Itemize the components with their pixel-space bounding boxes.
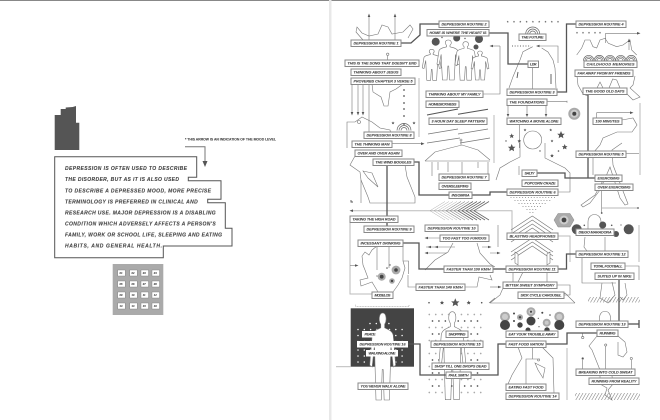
label: PEACE bbox=[364, 333, 376, 337]
label bbox=[576, 21, 626, 28]
routine index grid: 05 bbox=[120, 282, 123, 286]
family circles bbox=[432, 34, 483, 50]
label: HOME IS WHERE THE HEART IS bbox=[430, 31, 487, 35]
figure: diego maradona bbox=[582, 214, 639, 303]
arrow: torso bbox=[536, 45, 540, 47]
t-bar: routine 13 bbox=[638, 320, 640, 328]
label bbox=[576, 151, 626, 158]
label bbox=[429, 118, 487, 124]
label bbox=[595, 273, 634, 280]
label: PROVERBS CHAPTER 3 VERSE 5 bbox=[354, 80, 413, 84]
label: DEPRESSION ROUTINE 7 bbox=[442, 176, 487, 180]
figure: drinker bbox=[360, 246, 408, 292]
figure: peace walker bbox=[370, 313, 396, 400]
arrows: routine 1 up bbox=[368, 14, 396, 40]
label bbox=[425, 225, 478, 232]
routine index grid: 01 bbox=[120, 271, 123, 275]
label bbox=[595, 175, 622, 182]
label: HOMESICKNESS bbox=[428, 103, 457, 107]
description text: CONDITION WHICH ADVERSELY AFFECTS A PERSON'S bbox=[65, 221, 216, 227]
label bbox=[432, 363, 489, 370]
label bbox=[416, 284, 465, 290]
icon: mood level bar bbox=[55, 106, 79, 150]
label: DEPRESSION ROUTINE 4 bbox=[578, 23, 624, 27]
connectors: headphones bbox=[558, 236, 570, 262]
label: FAST FOOD NATION bbox=[508, 343, 544, 347]
label: OVERSLEEPING bbox=[442, 185, 469, 189]
label: RUNNING FROM REALITY bbox=[592, 380, 637, 384]
label: INSOMNIA bbox=[452, 194, 470, 198]
label bbox=[372, 292, 393, 298]
routine index grid: 13 bbox=[120, 304, 123, 308]
stars bbox=[391, 121, 416, 124]
label bbox=[439, 183, 471, 190]
label: DEPRESSION ROUTINE 16 bbox=[360, 343, 406, 347]
label bbox=[446, 331, 468, 338]
description text: TERMINOLOGY IS PREFERRED IN CLINICAL AND bbox=[65, 199, 198, 205]
label: INCESSANT DRINKING bbox=[360, 242, 401, 246]
label: DEPRESSION ROUTINE 11 bbox=[508, 268, 556, 272]
label: FASTER THAN 140 KM/H bbox=[418, 286, 463, 290]
description text: DEPRESSION IS OFTEN USED TO DESCRIBE bbox=[65, 166, 188, 172]
label: DEPRESSION ROUTINE 5 bbox=[578, 153, 624, 157]
figure: fast car hill bbox=[408, 225, 498, 287]
description box bbox=[55, 157, 232, 258]
routine index grid: 11 bbox=[143, 293, 146, 297]
rainbow bbox=[397, 124, 411, 130]
footnote: * THIS ARROW IS AN INDICATION OF THE MOOD LEVEL bbox=[185, 138, 276, 142]
label: THE FOUNDATIONS bbox=[510, 101, 545, 105]
label: FAR AWAY FROM MY FRIENDS bbox=[578, 72, 631, 76]
food circles bbox=[500, 307, 564, 333]
label bbox=[589, 378, 639, 384]
arrows: proverbs down bbox=[351, 84, 364, 116]
maradona circles bbox=[572, 222, 634, 237]
label: DEPRESSION ROUTINE 14 bbox=[508, 395, 556, 399]
figure: eater bbox=[508, 347, 554, 393]
label: RUNNING bbox=[600, 332, 616, 336]
label: DEPRESSION ROUTINE 6 bbox=[510, 191, 556, 195]
label: WATCHING A MOVIE ALONE bbox=[510, 120, 559, 124]
description text: HABITS, AND GENERAL HEALTH. bbox=[65, 244, 162, 250]
arrow: mood level bbox=[185, 147, 208, 167]
family figures bbox=[422, 40, 489, 80]
arrow: 100 minutes bbox=[597, 111, 634, 118]
figure: runner bbox=[582, 311, 632, 400]
label: THE FUTURE bbox=[522, 36, 544, 40]
routine index grid: 12 bbox=[154, 293, 157, 297]
figures and connector lines bbox=[347, 14, 640, 400]
label: EXERCISING bbox=[598, 177, 620, 181]
label bbox=[575, 70, 633, 76]
label: DEPRESSION ROUTINE 15 bbox=[434, 343, 481, 347]
label bbox=[522, 180, 558, 186]
routine index grid: 08 bbox=[154, 282, 157, 286]
label bbox=[576, 251, 628, 258]
label bbox=[522, 170, 537, 176]
label bbox=[431, 341, 483, 348]
label bbox=[358, 383, 408, 390]
label bbox=[528, 61, 538, 68]
drink circles bbox=[376, 264, 400, 284]
label: CHILDHOOD MEMORIES bbox=[586, 63, 635, 67]
rainbow: the future bbox=[526, 27, 540, 34]
label: DEPRESSION ROUTINE 2 bbox=[442, 23, 487, 27]
label: TOTAL FOOTBALL bbox=[594, 265, 623, 269]
routine index grid: 15 bbox=[143, 304, 146, 308]
figure: routine 3 torso bbox=[509, 46, 558, 89]
label: OVER EXERCISING bbox=[598, 186, 631, 190]
routine index grid: 16 bbox=[154, 304, 157, 308]
label bbox=[449, 192, 472, 198]
description text: THE DISORDER, BUT AS IT IS ALSO USED bbox=[65, 177, 179, 183]
arrows: foundations bbox=[507, 101, 567, 117]
label: DEPRESSION ROUTINE 13 bbox=[578, 323, 626, 327]
label bbox=[345, 60, 419, 66]
labels: routine labels bbox=[345, 21, 639, 400]
figure: shopper bbox=[439, 312, 466, 400]
label: SHOPPING bbox=[448, 333, 466, 337]
routine index grid bbox=[113, 264, 163, 315]
hatch: running bbox=[575, 393, 640, 400]
panel: dark peace background bbox=[336, 305, 414, 367]
label: SICK CYCLE CAROUSEL bbox=[520, 294, 562, 298]
label bbox=[355, 150, 402, 156]
chart: dot field behind shopping figure bbox=[429, 314, 482, 392]
song marker bbox=[386, 53, 389, 60]
figure: routine 1 outline bbox=[356, 25, 413, 106]
arrow: friends bbox=[606, 32, 640, 43]
dots column bbox=[403, 89, 405, 125]
label bbox=[576, 229, 614, 236]
label bbox=[352, 141, 392, 148]
figure: bed bbox=[425, 139, 490, 176]
label: BREAKING INTO COLD SWEAT bbox=[578, 371, 633, 375]
label bbox=[351, 78, 415, 84]
label bbox=[507, 89, 557, 96]
figure: exerciser bbox=[581, 118, 639, 213]
label bbox=[583, 88, 627, 94]
stars around movie bbox=[505, 128, 568, 157]
routine index grid: 04 bbox=[154, 271, 157, 275]
headphones bbox=[515, 252, 550, 265]
label: DEPRESSION ROUTINE 3 bbox=[510, 91, 555, 95]
label: OVER AND OVER AGAIN bbox=[358, 152, 400, 156]
arrow: thinking man bbox=[392, 142, 424, 145]
label bbox=[506, 266, 558, 272]
label bbox=[362, 331, 378, 338]
label: EATING FAST FOOD bbox=[508, 386, 544, 390]
description text: TO DESCRIBE A DEPRESSED MOOD, MORE PRECISE bbox=[65, 188, 212, 194]
description text: RESEARCH USE. MAJOR DEPRESSION IS A DISABLING bbox=[65, 210, 216, 216]
routine index grid: 09 bbox=[120, 293, 123, 297]
routine index grid: 07 bbox=[143, 282, 146, 286]
triangle bbox=[489, 298, 495, 303]
label bbox=[506, 393, 559, 400]
routine index grid: 06 bbox=[132, 282, 135, 286]
label bbox=[506, 384, 546, 390]
star row: shopping bbox=[428, 298, 483, 306]
label bbox=[366, 350, 398, 356]
target circle bbox=[568, 108, 580, 120]
description text: FAMILY, WORK OR SCHOOL LIFE, SLEEPING AND EATING bbox=[65, 233, 222, 239]
label bbox=[426, 101, 459, 108]
label: SALTY bbox=[524, 172, 535, 176]
label: 3 HOUR DAY SLEEP PATTERN bbox=[432, 120, 485, 124]
figure: friends bbox=[577, 38, 640, 100]
label bbox=[439, 174, 489, 180]
label: TOO FAST TOO FURIOUS bbox=[442, 237, 487, 241]
label: YOU NEVER WALK ALONE bbox=[360, 385, 406, 389]
label bbox=[373, 159, 414, 166]
label bbox=[595, 184, 633, 190]
figure: symphony person bbox=[490, 272, 575, 303]
label bbox=[351, 69, 401, 76]
figure: popcorn person bbox=[496, 124, 570, 192]
label bbox=[584, 61, 637, 68]
label bbox=[506, 331, 558, 338]
label bbox=[350, 216, 398, 222]
label: PAUL SMITH bbox=[448, 374, 469, 378]
label: FASTER THAN 100 KM/H bbox=[446, 268, 491, 272]
label bbox=[597, 330, 618, 336]
label: WALKING ALONE bbox=[368, 352, 396, 356]
label: THIS IS THE SONG THAT DOESN'T END bbox=[348, 62, 417, 66]
label: THINKING ABOUT JESUS bbox=[354, 71, 399, 75]
rainbows: childhood memories bbox=[583, 55, 637, 61]
label bbox=[440, 235, 489, 242]
label bbox=[364, 132, 414, 138]
label bbox=[357, 341, 408, 348]
routine index grid: 03 bbox=[143, 271, 146, 275]
arrow: symphony bbox=[490, 286, 502, 288]
label bbox=[439, 21, 489, 28]
label: DEPRESSION ROUTINE 10 bbox=[428, 227, 476, 231]
arrow: raised bbox=[628, 38, 630, 50]
label: BLASTING HEADPHONES bbox=[510, 235, 556, 239]
sleep slashes bbox=[427, 109, 490, 143]
label bbox=[507, 118, 561, 124]
figure: the thinking man bbox=[347, 117, 415, 203]
label bbox=[444, 266, 493, 272]
label: DEPRESSION ROUTINE 12 bbox=[578, 253, 626, 257]
label bbox=[507, 99, 547, 106]
star row bbox=[507, 21, 559, 23]
label: DEPRESSION ROUTINE 9 bbox=[366, 228, 412, 232]
label bbox=[506, 341, 546, 348]
arrows: too fast bbox=[424, 237, 500, 254]
label: DEPRESSION ROUTINE 1 bbox=[354, 42, 398, 46]
label bbox=[593, 118, 622, 124]
label: DIEGO MARADONA bbox=[578, 231, 612, 235]
label bbox=[364, 226, 414, 232]
label: POPCORN CRAZE bbox=[524, 182, 556, 186]
routine index grid: 02 bbox=[132, 271, 135, 275]
hexagon target bbox=[554, 214, 574, 227]
arrow: home bbox=[490, 45, 500, 47]
label bbox=[591, 263, 625, 270]
label: TAKING THE HIGH ROAD bbox=[352, 218, 396, 222]
label bbox=[507, 233, 558, 240]
route lines bbox=[387, 24, 639, 375]
label: THE GOOD OLD DAYS bbox=[586, 90, 625, 94]
dot triangle bbox=[511, 198, 555, 212]
label: MODELOS bbox=[374, 294, 391, 298]
panel: left page introduction bbox=[55, 106, 276, 315]
chevron house bbox=[511, 216, 553, 260]
label: THE THINKING MAN bbox=[354, 143, 390, 147]
label bbox=[576, 369, 635, 376]
label bbox=[427, 30, 489, 36]
label bbox=[351, 40, 401, 46]
hatch: football bbox=[588, 297, 640, 302]
label: SHOP TILL ONE DROPS DEAD bbox=[434, 365, 487, 369]
label bbox=[507, 189, 558, 196]
stars: friends bbox=[576, 32, 601, 34]
label: 100 MINUTES bbox=[596, 120, 620, 124]
label bbox=[426, 91, 483, 98]
label bbox=[519, 34, 546, 40]
label bbox=[358, 240, 403, 246]
label bbox=[518, 292, 564, 298]
arrow: drinker bbox=[350, 264, 358, 267]
label: BITTER SWEET SYMPHONY bbox=[506, 284, 555, 288]
label: SUITED UP IN NIKE bbox=[598, 275, 632, 279]
label bbox=[446, 372, 471, 378]
routine index grid: 14 bbox=[132, 304, 135, 308]
routine index grid: 10 bbox=[132, 293, 135, 297]
label: THE WIND BOGGLES bbox=[376, 161, 412, 165]
label: DEPRESSION ROUTINE 8 bbox=[366, 134, 412, 138]
label bbox=[576, 321, 628, 328]
label bbox=[503, 282, 557, 288]
label: THINKING ABOUT MY FAMILY bbox=[428, 93, 481, 97]
label: LDR bbox=[530, 63, 537, 67]
chevron arrow bbox=[350, 202, 512, 233]
description text bbox=[65, 166, 222, 250]
label: EAT YOUR TROUBLE AWAY bbox=[508, 333, 556, 337]
